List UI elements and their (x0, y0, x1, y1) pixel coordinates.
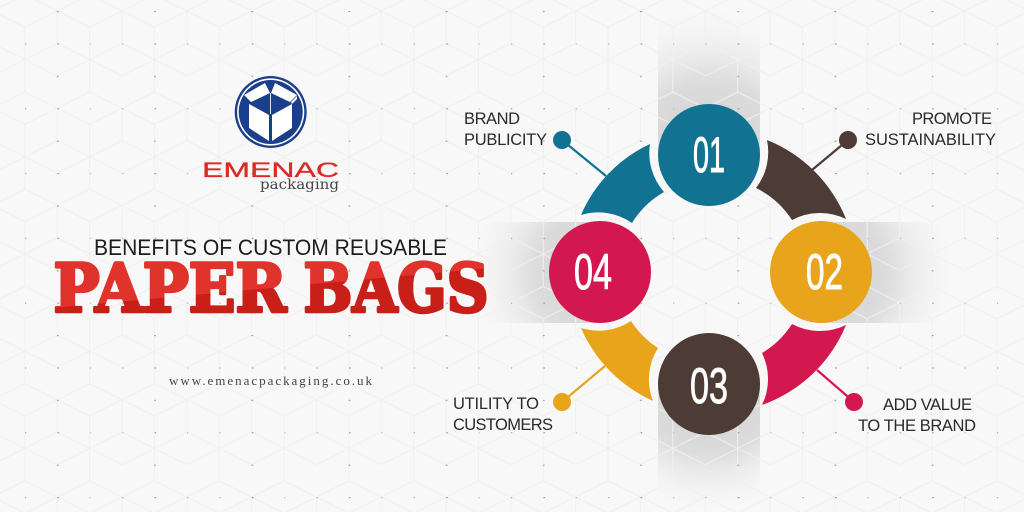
callout: utility to customers (453, 366, 605, 434)
step 04: 04 (574, 244, 612, 300)
segment: crimson arc (762, 324, 846, 405)
ring diagram (549, 104, 872, 435)
main heading (54, 250, 488, 328)
callout: utility to customers: CUSTOMERS (453, 416, 553, 434)
main heading: BAGS (304, 250, 488, 328)
segment: brown arc (756, 140, 846, 220)
logo subtitle: packaging (260, 177, 339, 193)
icon: box badge (235, 76, 307, 148)
callout: add value to the brand (817, 370, 976, 435)
title line: BENEFITS OF CUSTOM REUSABLE (94, 235, 447, 260)
callout: brand publicity: PUBLICITY (464, 131, 547, 149)
step 01 (658, 104, 760, 206)
step 03: 03 (690, 358, 728, 414)
logo wordmark: EMENAC (202, 159, 339, 182)
step 03 (658, 333, 760, 435)
callout: promote sustainability: PROMOTE (912, 110, 992, 128)
step 01: 01 (693, 127, 725, 183)
segment: teal arc (581, 144, 664, 223)
callout: brand publicity: BRAND (464, 110, 520, 128)
callout: promote sustainability (812, 110, 996, 170)
step 02 (770, 221, 872, 323)
callout: utility to customers: UTILITY TO (453, 395, 539, 413)
step 02: 02 (806, 244, 843, 300)
step 04 (549, 221, 651, 323)
callout: add value to the brand: ADD VALUE (883, 396, 972, 414)
website url: www.emenacpackaging.co.uk (169, 373, 372, 388)
callout: brand publicity (464, 110, 606, 176)
segment: amber arc (581, 321, 658, 401)
logo: Emenac Packaging (202, 76, 339, 193)
callout: add value to the brand: TO THE BRAND (858, 417, 976, 435)
main heading: PAPER (54, 250, 288, 328)
callout: promote sustainability: SUSTAINABILITY (865, 131, 996, 149)
shadow bands (468, 7, 956, 512)
